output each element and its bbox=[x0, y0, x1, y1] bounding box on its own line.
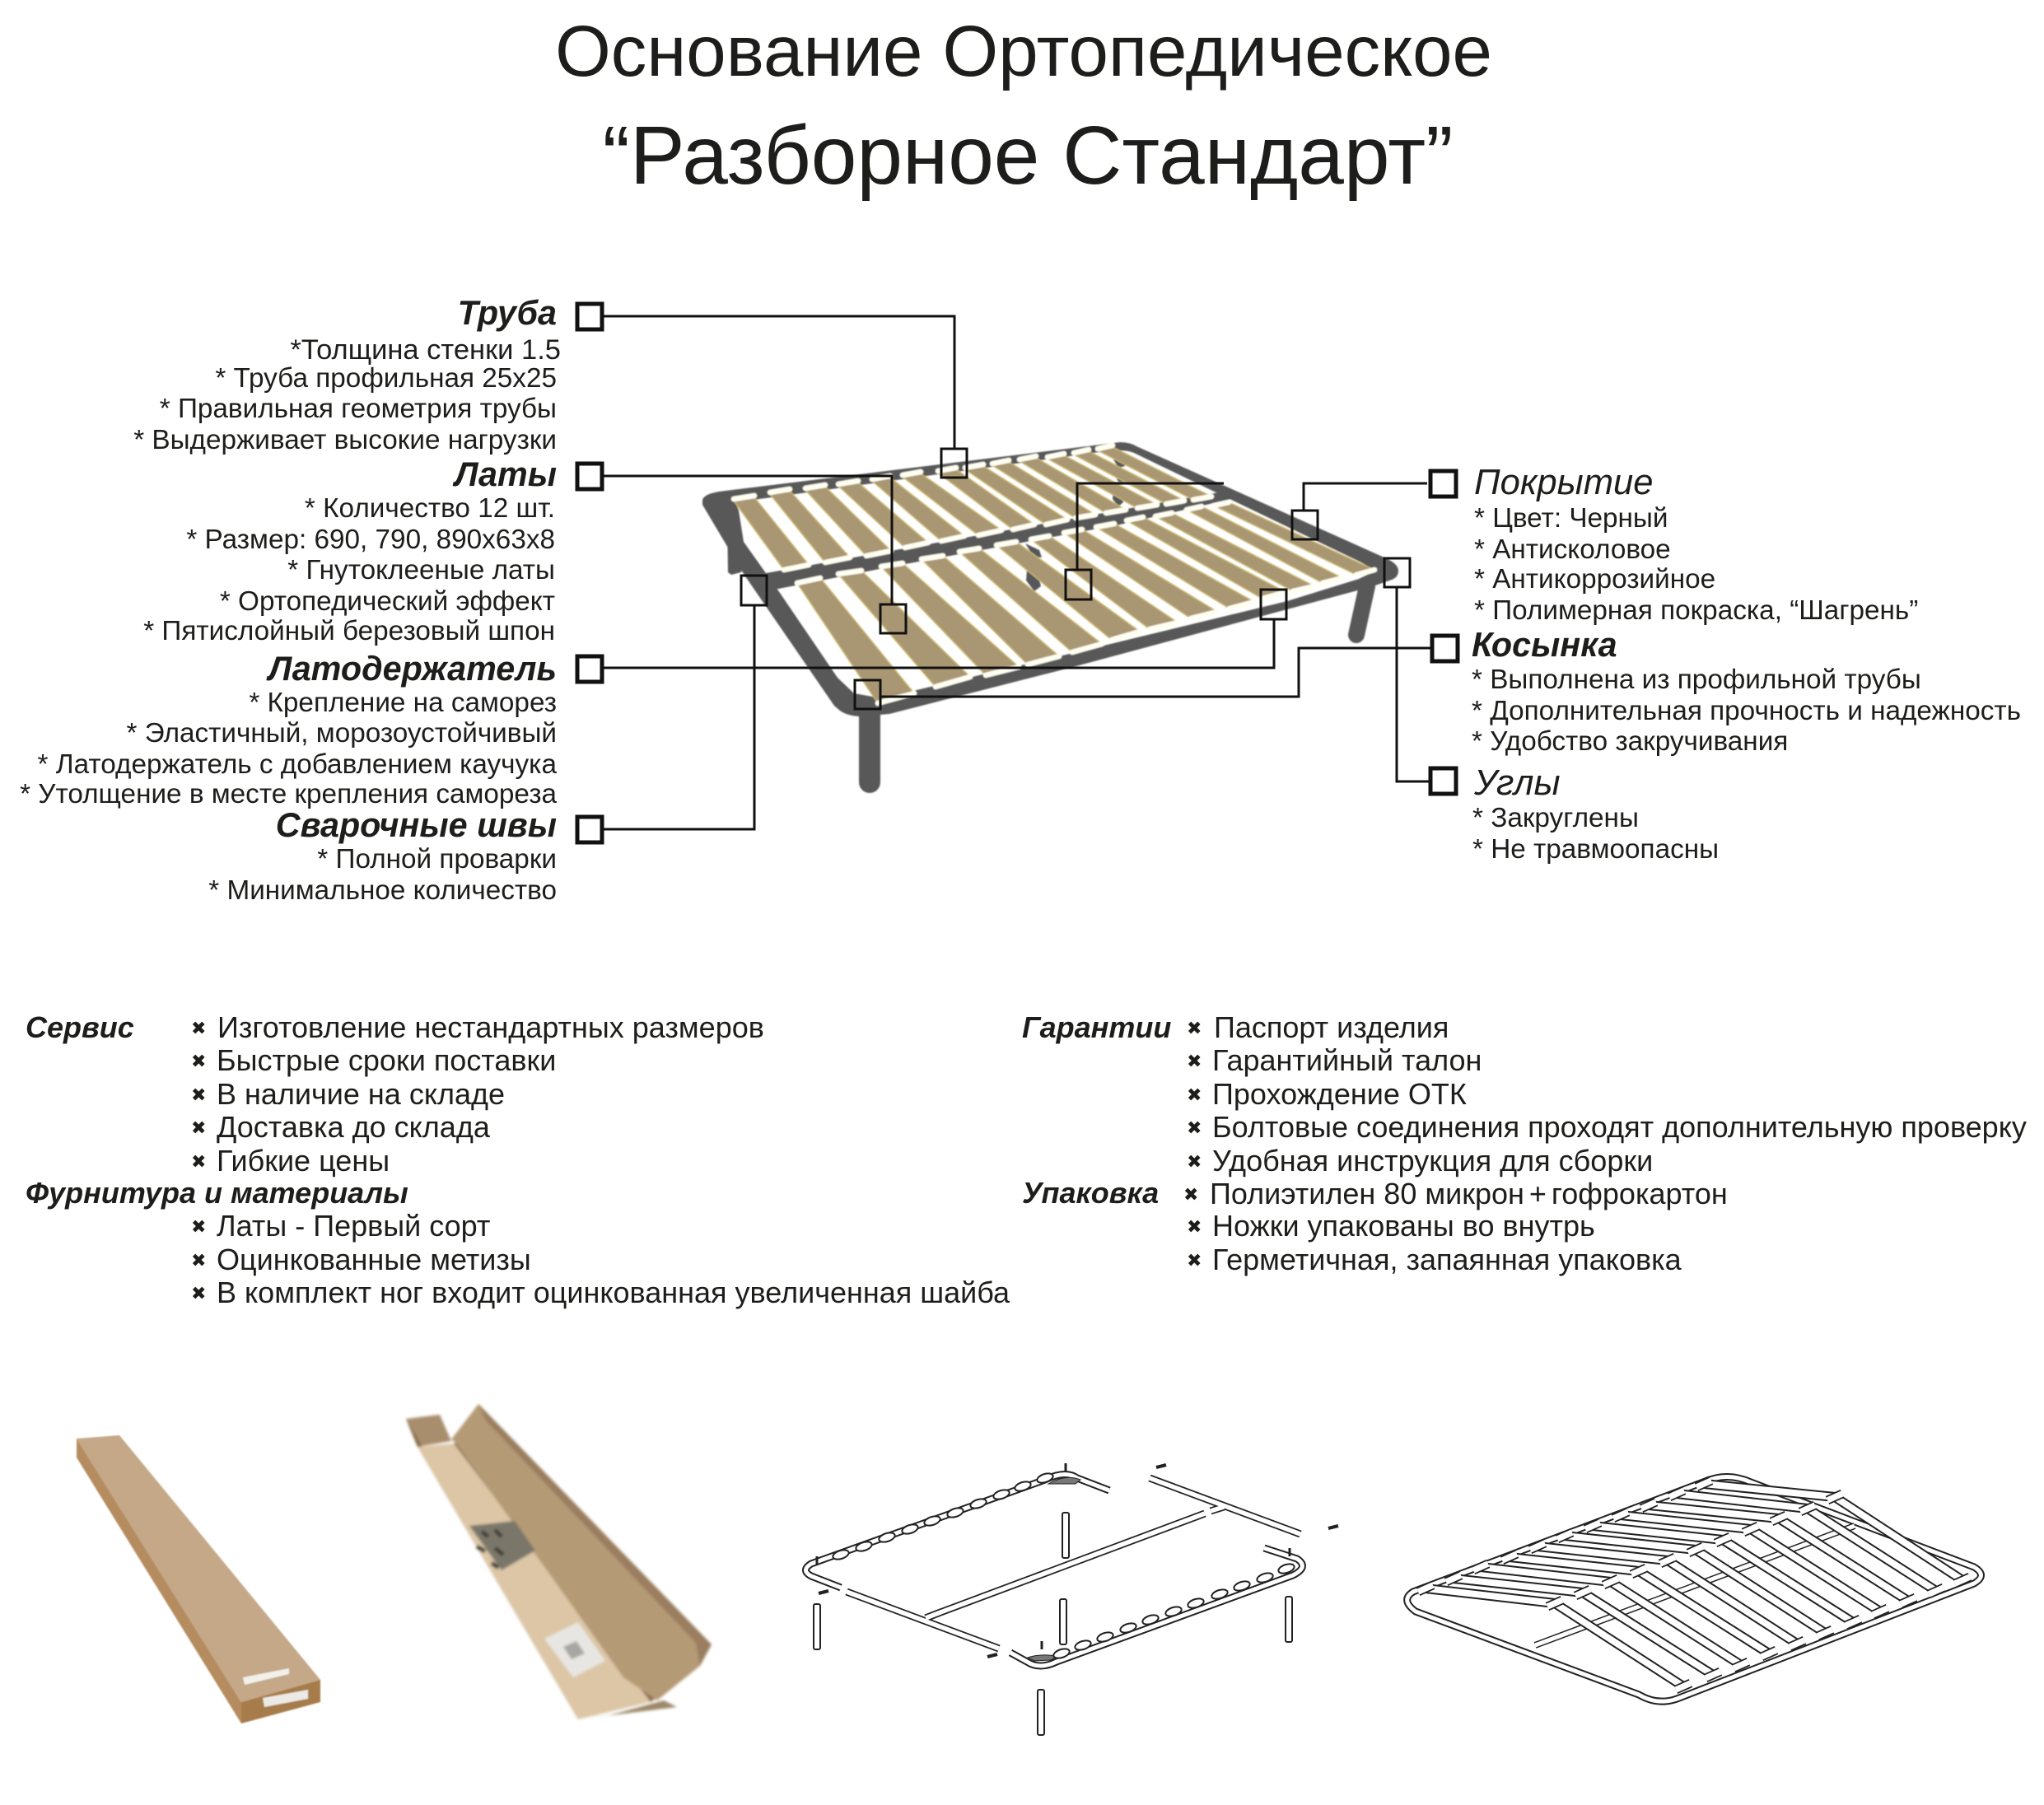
front leg bbox=[859, 715, 880, 782]
list: Латодержатель bbox=[20, 688, 557, 809]
list: Фурнитура и материалы: Оцинкованные метизы bbox=[217, 1243, 531, 1276]
slats bbox=[1426, 1484, 1962, 1686]
list: Труба bbox=[133, 334, 561, 455]
list: Сервис: В наличие на складе bbox=[217, 1077, 505, 1111]
list: Углы: * Закруглены bbox=[1472, 803, 1639, 833]
panel: service and materials bbox=[26, 1010, 1010, 1309]
legs bbox=[814, 1513, 1292, 1735]
list: Сервис: Изготовление нестандартных размеров bbox=[217, 1010, 764, 1044]
marker: Труба bbox=[577, 304, 602, 329]
marker: Латодержатель bbox=[577, 656, 602, 682]
list: Косынка: * Дополнительная прочность и надежность bbox=[1472, 696, 2021, 726]
panel: right specifications bbox=[1430, 463, 2021, 865]
marker: Сварочные швы bbox=[577, 817, 602, 842]
list: Сварочные швы bbox=[208, 844, 557, 906]
list: Фурнитура и материалы: ✖ bbox=[191, 1284, 206, 1304]
list: Сварочные швы: * Полной проварки bbox=[317, 844, 557, 875]
list: Покрытие: * Антисколовое bbox=[1474, 534, 1671, 565]
heading: Косынка: Косынка bbox=[1472, 626, 1617, 664]
list: Сервис: Гибкие цены bbox=[217, 1144, 390, 1178]
list: Упаковка bbox=[1183, 1177, 1728, 1276]
title: Основание Ортопедическое bbox=[555, 12, 1492, 91]
diagram: assembled frame bbox=[1407, 1477, 1981, 1701]
marker: Косынка bbox=[1432, 636, 1458, 661]
heading: Покрытие: Покрытие bbox=[1474, 463, 1654, 502]
list: Упаковка: ✖ bbox=[1187, 1217, 1202, 1238]
list: Фурнитура и материалы: ✖ bbox=[191, 1251, 206, 1271]
list: Труба: *Толщина стенки 1.5 bbox=[290, 334, 561, 366]
list: Сервис: Доставка до склада bbox=[217, 1110, 491, 1144]
list: Сервис: ✖ bbox=[191, 1052, 206, 1072]
list: Гарантии bbox=[1187, 1010, 2027, 1178]
list: Упаковка: Ножки упакованы во внутрь bbox=[1212, 1209, 1595, 1243]
list: Гарантии: Болтовые соединения проходят дополнительную проверку bbox=[1212, 1110, 2027, 1144]
list: Латы bbox=[143, 493, 555, 646]
list: Гарантии: Гарантийный талон bbox=[1212, 1043, 1482, 1077]
list: Труба: * Правильная геометрия трубы bbox=[160, 394, 557, 424]
list: Упаковка: ✖ bbox=[1183, 1185, 1198, 1206]
slat holders bbox=[1418, 1481, 1970, 1690]
front rail pads bbox=[1052, 1562, 1295, 1660]
list: Гарантии: Паспорт изделия bbox=[1214, 1010, 1449, 1044]
list: Фурнитура и материалы: ✖ bbox=[191, 1217, 206, 1238]
title: “Разборное Стандарт” bbox=[603, 110, 1453, 202]
list: Покрытие bbox=[1474, 503, 1918, 626]
marker: Латы bbox=[577, 464, 602, 489]
slats, foot section bbox=[797, 502, 1374, 703]
list: Латодержатель: * Латодержатель с добавлением каучука bbox=[38, 749, 557, 780]
photo: open carton box with parts bbox=[406, 1404, 712, 1719]
heading: Латодержатель: Латодержатель bbox=[266, 650, 557, 688]
diagram: exploded frame parts bbox=[805, 1463, 1338, 1735]
marker: Углы bbox=[1430, 768, 1456, 794]
list: Углы bbox=[1472, 803, 1719, 865]
rail pads bbox=[832, 1472, 1054, 1561]
list: Покрытие: * Антикоррозийное bbox=[1474, 564, 1715, 595]
front rail bbox=[1010, 1548, 1302, 1666]
heading: Латы: Латы bbox=[452, 455, 557, 493]
list: Гарантии: Прохождение ОТК bbox=[1212, 1077, 1467, 1111]
callout leader lines bbox=[603, 316, 1430, 829]
bolts and pins bbox=[817, 1463, 1338, 1657]
frame outline bbox=[1407, 1477, 1981, 1701]
list: Гарантии: ✖ bbox=[1187, 1118, 1202, 1139]
list: Латы: * Количество 12 шт. bbox=[305, 493, 555, 524]
photo: closed carton box bbox=[77, 1435, 320, 1723]
right leg bbox=[1356, 586, 1367, 635]
back rail bbox=[805, 1474, 1109, 1588]
callout target boxes on the bed bbox=[741, 449, 1410, 709]
list: Упаковка: Полиэтилен 80 микрон + гофрокартон bbox=[1210, 1177, 1728, 1210]
slats, head section bbox=[734, 447, 1211, 570]
list: Сервис bbox=[191, 1010, 764, 1178]
heading: Сервис: Сервис bbox=[26, 1010, 134, 1044]
heading: Фурнитура и материалы: Фурнитура и материалы bbox=[26, 1176, 408, 1210]
list: Упаковка: ✖ bbox=[1187, 1251, 1202, 1271]
frame bbox=[702, 442, 1398, 716]
list: Сервис: ✖ bbox=[191, 1152, 206, 1173]
list: Косынка: * Удобство закручивания bbox=[1472, 726, 1788, 757]
heading: Труба: Труба bbox=[458, 294, 557, 332]
list: Гарантии: Удобная инструкция для сборки bbox=[1212, 1144, 1653, 1178]
marker: Покрытие bbox=[1430, 471, 1456, 497]
list: Косынка bbox=[1472, 665, 2021, 757]
list: Углы: * Не травмоопасны bbox=[1472, 834, 1719, 865]
title bbox=[555, 12, 1492, 202]
heading: Углы: Углы bbox=[1473, 763, 1561, 803]
side rails and center bar bbox=[847, 1478, 1300, 1649]
heading: Гарантии: Гарантии bbox=[1022, 1010, 1171, 1044]
center bar bbox=[766, 492, 1231, 591]
list: Труба: * Труба профильная 25х25 bbox=[215, 363, 557, 394]
list: Фурнитура и материалы: В комплект ног входит оцинкованная увеличенная шайба bbox=[217, 1276, 1010, 1309]
list: Сервис: ✖ bbox=[191, 1085, 206, 1106]
list: Латодержатель: * Крепление на саморез bbox=[249, 688, 557, 718]
list: Гарантии: ✖ bbox=[1187, 1052, 1202, 1072]
list: Гарантии: ✖ bbox=[1187, 1019, 1202, 1039]
list: Латы: * Гнутоклееные латы bbox=[287, 555, 555, 585]
panel: left specifications bbox=[20, 294, 602, 906]
list: Сварочные швы: * Минимальное количество bbox=[208, 875, 557, 906]
list: Латодержатель: * Эластичный, морозоустойчивый bbox=[127, 718, 557, 749]
list: Покрытие: * Цвет: Черный bbox=[1474, 503, 1668, 534]
list: Труба: * Выдерживает высокие нагрузки bbox=[133, 425, 557, 455]
support spindles bbox=[1025, 459, 1125, 591]
bed illustration bbox=[702, 442, 1398, 782]
list: Латы: * Ортопедический эффект bbox=[220, 586, 555, 617]
list: Латы: * Пятислойный березовый шпон bbox=[143, 616, 555, 646]
list: Сервис: Быстрые сроки поставки bbox=[217, 1043, 556, 1077]
list: Фурнитура и материалы: Латы - Первый сорт bbox=[217, 1209, 490, 1243]
list: Гарантии: ✖ bbox=[1187, 1152, 1202, 1173]
heading: Сварочные швы: Сварочные швы bbox=[276, 806, 557, 844]
list: Латодержатель: * Утолщение в месте крепления самореза bbox=[20, 779, 557, 809]
panel: guarantees and packaging bbox=[1022, 1010, 2027, 1276]
back left leg bbox=[727, 519, 744, 575]
list: Гарантии: ✖ bbox=[1187, 1085, 1202, 1106]
list: Покрытие: * Полимерная покраска, “Шагрень” bbox=[1474, 595, 1918, 626]
corner plates bbox=[1028, 1477, 1080, 1661]
list: Латы: * Размер: 690, 790, 890х63х8 bbox=[186, 525, 555, 555]
list: Косынка: * Выполнена из профильной трубы bbox=[1472, 665, 1921, 695]
list: Фурнитура и материалы bbox=[191, 1209, 1010, 1309]
center bar bbox=[1535, 1526, 1855, 1645]
heading: Упаковка: Упаковка bbox=[1022, 1176, 1159, 1210]
list: Упаковка: Герметичная, запаянная упаковка bbox=[1212, 1243, 1682, 1276]
list: Сервис: ✖ bbox=[191, 1019, 206, 1039]
slat holders bbox=[734, 445, 1374, 703]
list: Сервис: ✖ bbox=[191, 1118, 206, 1139]
